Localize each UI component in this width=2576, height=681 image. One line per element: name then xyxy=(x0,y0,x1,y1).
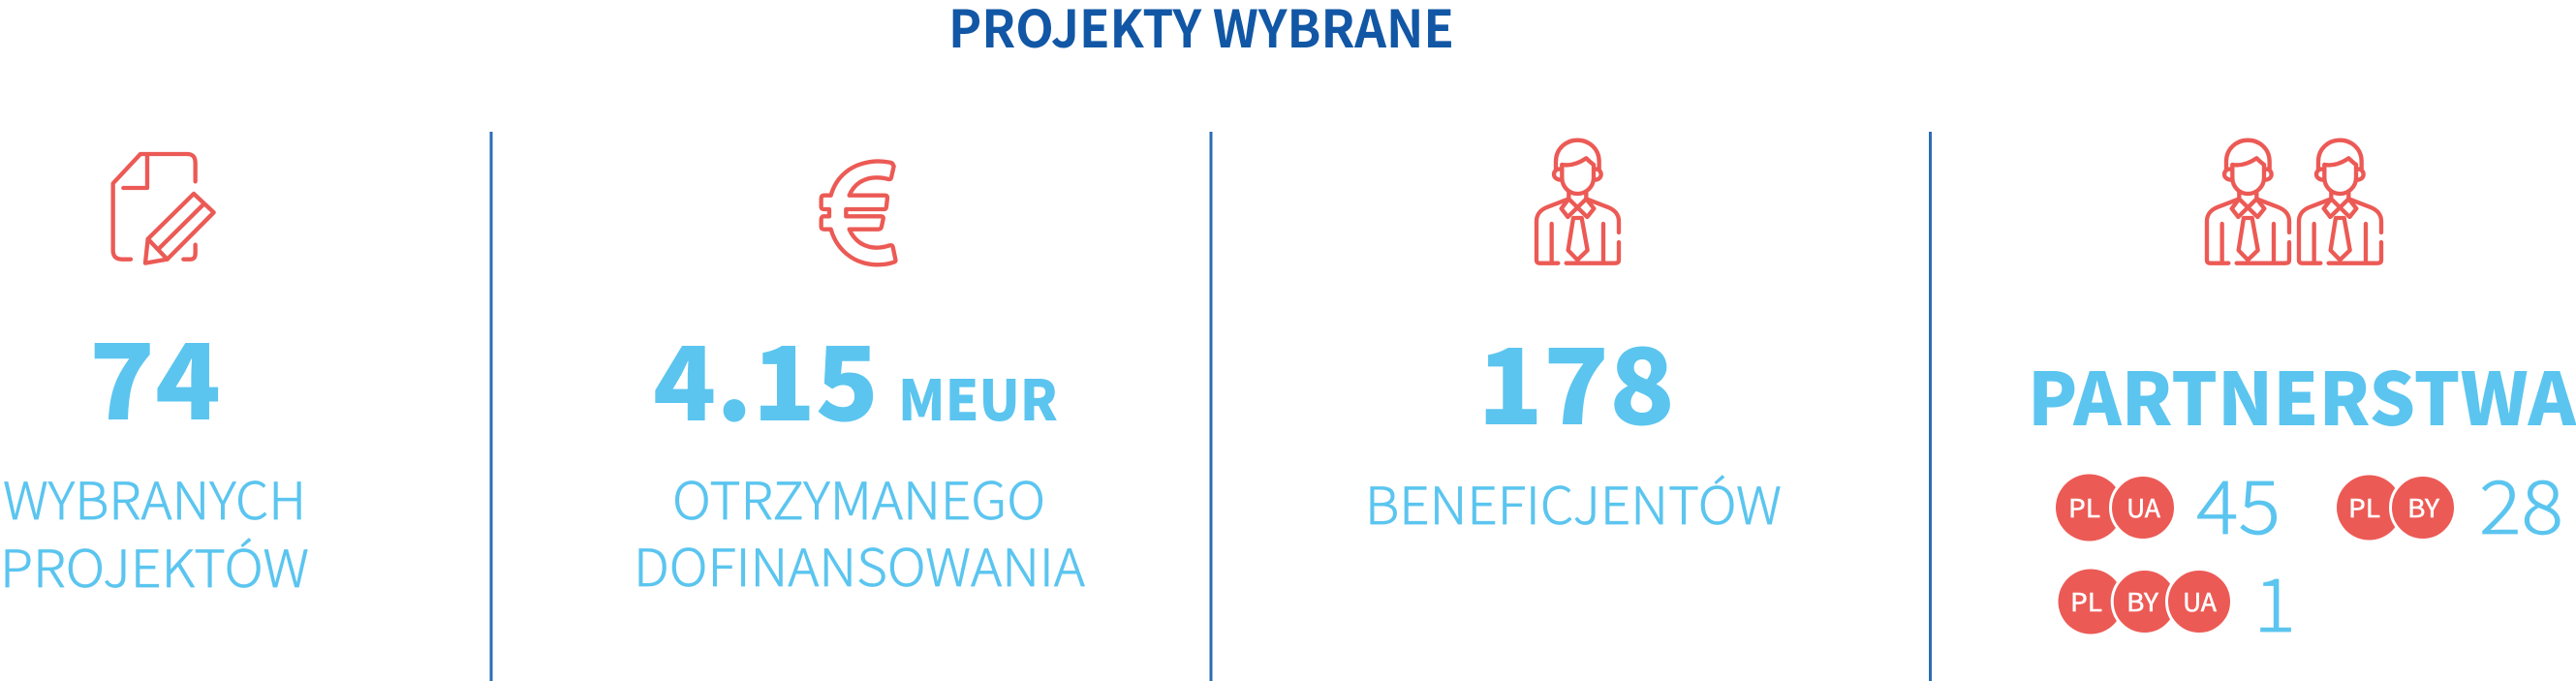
panel: beneficiaries xyxy=(1365,140,1782,540)
panel: partnerships xyxy=(2028,140,2576,653)
divider 3 xyxy=(1929,132,1932,681)
badge group: PL UA xyxy=(2056,475,2176,541)
label: otrzymanego dofinansowania: OTRZYMANEGO xyxy=(672,461,1045,535)
number: 178: 178 xyxy=(1477,303,1675,455)
badge group: PL BY: PL xyxy=(2348,489,2380,525)
count: 28: 28 xyxy=(2479,449,2563,555)
badge group: PL UA: PL xyxy=(2068,489,2100,525)
badge group: PL UA: UA xyxy=(2126,489,2160,525)
divider 1 xyxy=(490,132,492,681)
icon: person right xyxy=(2299,140,2381,263)
count: 1: 1 xyxy=(2253,546,2296,653)
unit: MEUR: MEUR xyxy=(898,356,1058,437)
label: beneficjentow: BENEFICJENTÓW xyxy=(1365,466,1782,540)
icon: two people xyxy=(2207,140,2381,263)
icon: person left xyxy=(2207,140,2289,263)
divider 2 xyxy=(1209,132,1213,681)
icon: document with pencil xyxy=(113,154,214,263)
panel: funding xyxy=(634,161,1085,602)
badge group: PL BY xyxy=(2337,475,2455,541)
number: 74: 74 xyxy=(89,298,221,450)
icon: person xyxy=(1536,140,1619,263)
badge group: PL BY UA: PL xyxy=(2070,583,2102,619)
label: otrzymanego dofinansowania: DOFINANSOWANIA xyxy=(634,528,1085,602)
badge group: PL BY UA xyxy=(2058,570,2232,634)
badge group: PL BY UA: BY xyxy=(2126,583,2158,619)
badge group: PL BY UA: UA xyxy=(2183,583,2217,619)
label: wybranych projektow: WYBRANYCH xyxy=(3,461,306,535)
label: wybranych projektow: PROJEKTÓW xyxy=(0,529,309,603)
icon: euro xyxy=(822,161,895,264)
badge group: PL BY: BY xyxy=(2407,489,2439,525)
count: 45: 45 xyxy=(2196,449,2281,555)
number: 4.15: 4.15 xyxy=(653,301,879,450)
panel: selected projects xyxy=(0,154,309,603)
heading: partnerstwa: PARTNERSTWA xyxy=(2028,341,2576,447)
